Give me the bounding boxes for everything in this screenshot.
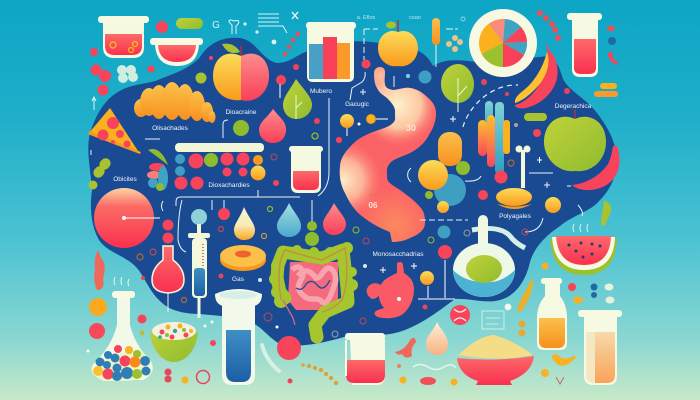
ring pie chart <box>469 9 537 77</box>
small blue-field dots <box>450 79 570 163</box>
small crescent and dot <box>541 355 575 384</box>
yellow pod <box>496 188 561 213</box>
stomach labels: 06 <box>369 201 378 210</box>
small rings left <box>137 206 272 302</box>
banana <box>515 42 558 108</box>
pizza slice <box>88 108 141 154</box>
red chili <box>572 146 620 190</box>
top labels and icons <box>212 12 298 34</box>
red squiggle <box>395 338 416 358</box>
yellow node <box>420 271 434 285</box>
orange capsule with stem <box>432 18 458 67</box>
intestines <box>269 242 358 340</box>
flask with coloured balls <box>92 291 153 381</box>
orange bean <box>517 279 533 312</box>
connector with red ring <box>522 205 582 235</box>
label: Olisachades: Olisachades <box>152 125 189 132</box>
node on stomach <box>397 297 401 301</box>
label: Dioxachardies: Dioxachardies <box>208 182 250 189</box>
apple: yellow and red <box>213 44 269 101</box>
red dot and green bean <box>156 18 203 33</box>
steam above flask <box>114 277 129 286</box>
stomach labels: S A <box>369 193 377 198</box>
green dot <box>233 120 249 136</box>
dashed arc <box>463 85 518 127</box>
large orange test tube <box>578 310 622 385</box>
top labels: a. Eflos <box>357 15 375 21</box>
bottle orange <box>537 278 567 350</box>
dashed connector <box>420 219 468 221</box>
wave <box>413 364 456 370</box>
pale curved stroke <box>262 345 279 371</box>
watermelon <box>550 236 617 275</box>
right side small items <box>594 26 618 97</box>
green pod right <box>601 200 611 226</box>
sparks by cylinder <box>204 320 216 346</box>
beaker: red liquid with bubbles <box>98 16 149 58</box>
yellow beads <box>518 320 526 336</box>
bowl: red <box>150 38 203 66</box>
test tube top right <box>567 13 602 77</box>
top labels <box>357 15 465 21</box>
curved arrows <box>408 168 553 182</box>
label: Monosacchadrias: Monosacchadrias <box>373 251 424 258</box>
red drop small <box>323 203 346 235</box>
decorative small dots <box>271 118 342 160</box>
label: Obicites: Obicites <box>113 176 137 183</box>
line diagram <box>482 304 511 329</box>
bone shape pin <box>516 146 530 188</box>
label: Gacugic: Gacugic <box>345 101 370 108</box>
sparks <box>363 263 428 310</box>
green capsule <box>524 113 547 121</box>
small yellow apple <box>378 20 418 66</box>
large red ball <box>94 188 154 248</box>
green leaf <box>283 79 312 119</box>
green node column <box>305 221 319 246</box>
red worm <box>94 250 105 290</box>
stomach labels: 30 <box>406 123 416 133</box>
red flask <box>152 246 184 312</box>
orange and red balls <box>86 298 146 352</box>
red bead arc <box>537 10 561 41</box>
blue drop <box>277 203 301 237</box>
top labels: coao <box>409 15 421 21</box>
orange caterpillar <box>134 82 216 123</box>
yellow beads left of stomach <box>336 114 388 143</box>
colourful pile <box>147 149 168 191</box>
blue central blob <box>88 38 617 346</box>
label: Gas: Gas <box>232 276 245 283</box>
yellow drop <box>234 207 255 240</box>
label: Polyagales: Polyagales <box>499 213 532 220</box>
tan dot cluster <box>446 35 463 52</box>
flask green centre <box>453 215 525 297</box>
small bottom items <box>397 364 458 386</box>
steam <box>573 224 588 232</box>
X circle <box>450 305 470 325</box>
small ornaments <box>478 160 571 200</box>
rack of coloured spheres <box>174 143 279 190</box>
node on ball <box>122 216 160 220</box>
small red stomach <box>367 262 414 318</box>
molecule orange yellow teal <box>418 132 470 213</box>
dots near apple <box>196 56 299 98</box>
green beans left <box>88 156 113 190</box>
right dots <box>542 262 614 304</box>
label: Degerachica: Degerachica <box>555 103 592 110</box>
red bowl with powder <box>457 335 534 385</box>
scattered red dots <box>90 48 154 96</box>
ornament dots <box>353 227 470 324</box>
circles inside blue lower <box>264 313 338 337</box>
label: Mubero: Mubero <box>310 88 332 95</box>
left beaker bottom <box>345 333 385 385</box>
coloured test bars <box>478 101 510 184</box>
jar: bar chart <box>306 22 356 82</box>
tree leaf <box>441 64 474 112</box>
small arrows <box>91 97 228 155</box>
bottom row dots and ring <box>164 368 292 384</box>
connector lines <box>162 98 329 252</box>
teal and red node column <box>418 226 455 299</box>
small beaker <box>289 146 323 193</box>
stomach labels <box>369 123 416 210</box>
label: Gas <box>218 274 262 283</box>
stomach large <box>340 67 436 242</box>
top labels and icons: G <box>212 20 220 31</box>
golden bead worm <box>301 363 338 385</box>
red bead chain <box>283 32 300 56</box>
top-middle connector and red dot <box>350 29 378 100</box>
small dots near lines <box>243 22 276 44</box>
red drop <box>259 109 286 143</box>
tall cylinder with blue liquid <box>215 289 262 385</box>
peach drop <box>426 322 448 355</box>
teal ball <box>394 70 432 87</box>
syringe <box>188 209 210 318</box>
large green apple <box>544 109 606 171</box>
red ball bottom <box>277 336 301 360</box>
label: Dioacraine: Dioacraine <box>225 109 257 116</box>
orange ring <box>220 245 266 271</box>
green bowl with cereal <box>150 322 198 362</box>
white cluster <box>117 65 138 83</box>
red dots on stem <box>162 208 230 244</box>
